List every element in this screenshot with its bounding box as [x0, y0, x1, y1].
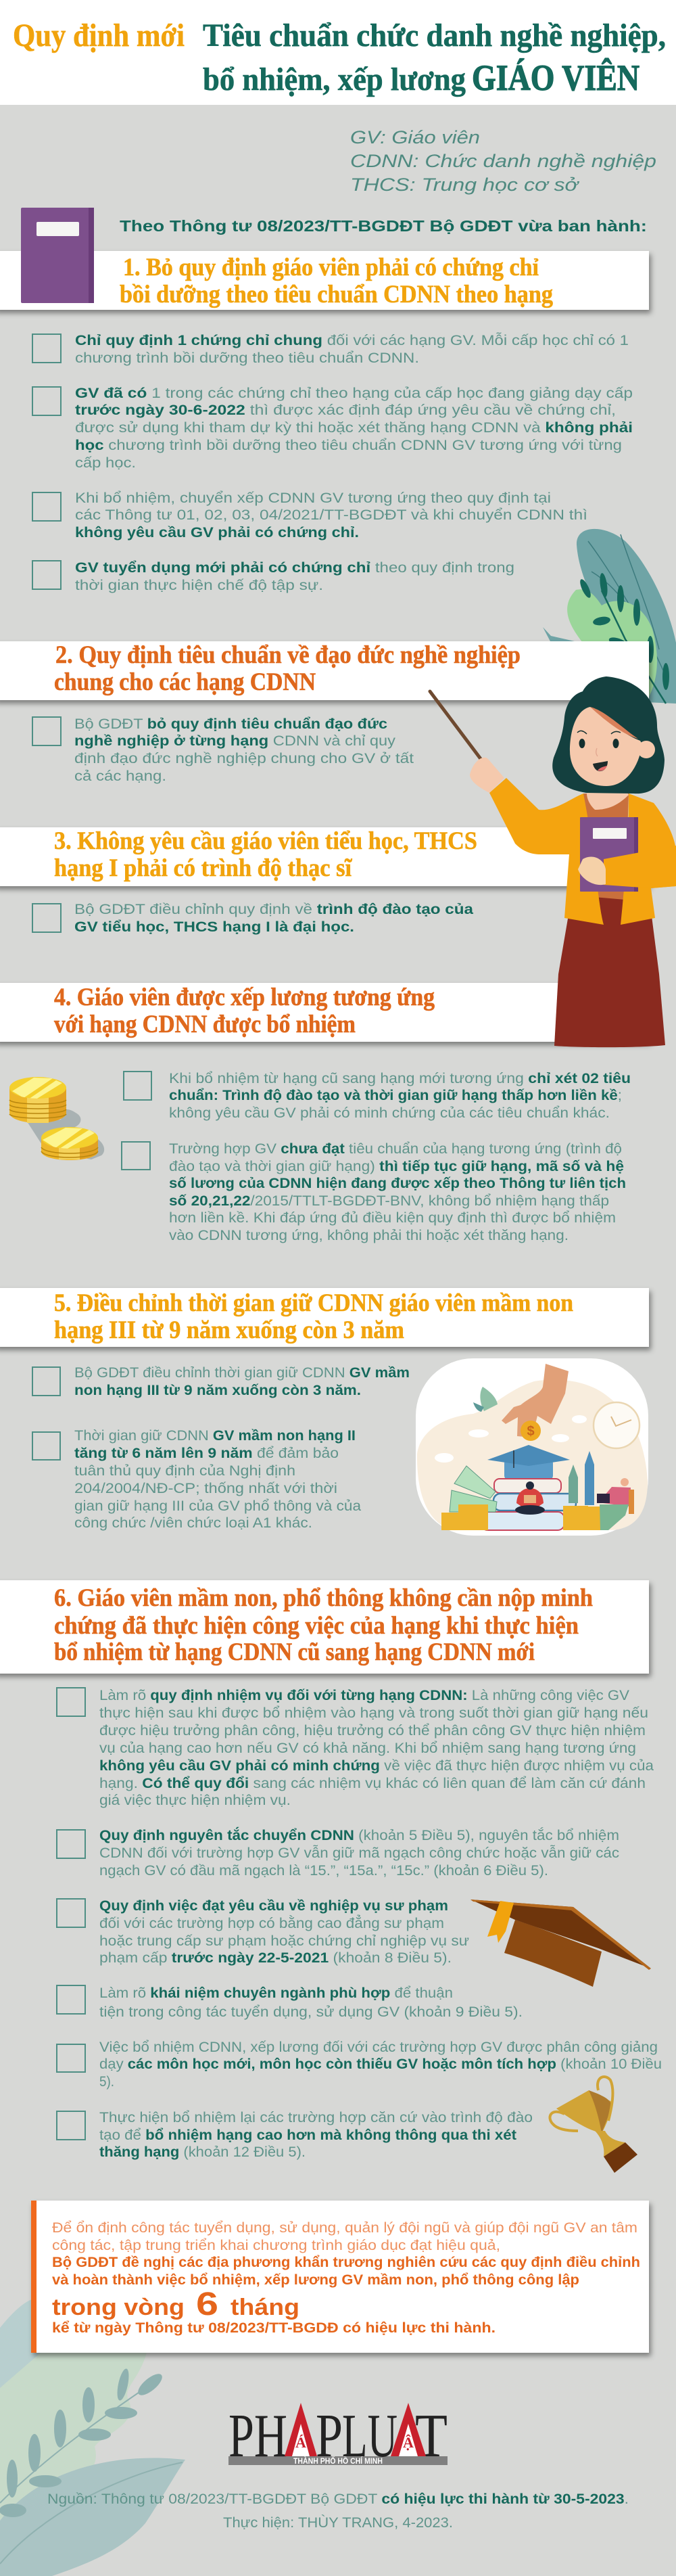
section 4 items: không yêu cầu GV phải có minh chứng của các tiêu chuẩn khác.: [169, 1105, 610, 1121]
section 3 item: GV tiểu học, THCS hạng I là đại học.: [74, 919, 354, 935]
heading 6: bổ nhiệm từ hạng CDNN cũ sang hạng CDNN mới: [54, 1638, 535, 1666]
skirt: [554, 895, 665, 1047]
section 6 items: vụ của hạng cao hơn nếu GV có khả năng. Khi bổ nhiệm sang hạng tương ứng: [99, 1741, 636, 1756]
books: [494, 1479, 561, 1493]
logo: Pháp Luật: Á: [295, 2434, 306, 2451]
icon: leaves top right: [543, 529, 676, 704]
neck: [587, 781, 629, 810]
section 6 items: Việc bổ nhiệm CDNN, xếp lương đối với các trường hợp GV được phân công giảng: [99, 2040, 658, 2055]
heading 4: với hạng CDNN được bổ nhiệm: [54, 1011, 356, 1038]
heading 5: [0, 1288, 649, 1347]
man with laptop: [600, 1487, 631, 1506]
holding hand: [578, 856, 606, 885]
title: GIÁO VIÊN: [472, 58, 639, 98]
section 6 items: được hiệu trưởng phân công, hiệu trưởng có thể phân công GV thực hiện nhiệm: [99, 1723, 646, 1739]
pencils: [569, 1465, 578, 1503]
section 6 items: không yêu cầu GV phải có minh chứng về việc đã thực hiện được nhiệm vụ của: [99, 1758, 654, 1774]
heading 5: hạng III từ 9 năm xuống còn 3 năm: [54, 1316, 404, 1344]
illustration: money and education: $: [527, 1424, 535, 1439]
abbreviations legend: GV: Giáo viên: [350, 127, 480, 147]
section 5 items: [32, 1365, 410, 1531]
section 1 items: Chỉ quy định 1 chứng chỉ chung đối với các hạng GV. Mỗi cấp học chỉ có 1: [75, 333, 629, 348]
section 1 items: trước ngày 30-6-2022 thì được xác định đáp ứng yêu cầu về chứng chỉ,: [75, 402, 616, 418]
raised hand: [470, 758, 504, 793]
icon: leaves bottom left: [0, 2297, 185, 2576]
section 5 items: gian giữ hạng III của GV phổ thông và của: [74, 1498, 361, 1514]
section 6 items: [57, 1688, 662, 2160]
section 4 items: hơn liền kề. Khi đáp ứng đủ điều kiện quy định thì được bổ nhiệm: [169, 1210, 616, 1226]
illustration: teacher: [430, 676, 676, 1047]
title: Quy định mới: [13, 18, 185, 53]
heading 2: 2. Quy định tiêu chuẩn về đạo đức nghề nghiệp: [55, 641, 521, 669]
section 1 items: thời gian thực hiện chế độ tập sự.: [75, 578, 323, 593]
eyes and mouth: [579, 739, 585, 748]
section 6 items: tiện trong công tác tuyển dụng, sử dụng GV (khoản 9 Điều 5).: [99, 2004, 523, 2020]
section 3 item: [32, 902, 473, 935]
leaves: [480, 1387, 498, 1411]
heading 4: [0, 983, 649, 1042]
callout: conclusion: Bộ GDĐT đề nghị các địa phương khẩn trương nghiên cứu các quy định điều chỉnh: [52, 2255, 640, 2270]
source credits: Nguồn: Thông tư 08/2023/TT-BGDĐT Bộ GDĐT có hiệu lực thi hành từ 30-5-2023 .: [47, 2491, 629, 2507]
heading 4: 4. Giáo viên được xếp lương tương ứng: [54, 984, 435, 1011]
section 5 items: non hạng III từ 9 năm xuống còn 3 năm.: [74, 1383, 361, 1398]
intro line: Theo Thông tư 08/2023/TT-BGDĐT Bộ GDĐT vừa ban hành:: [120, 217, 647, 235]
section 5 items: công chức /viên chức loại A1 khác.: [74, 1515, 312, 1531]
hair: [552, 676, 665, 794]
section 6 items: đối với các trường hợp có bằng cao đẳng sư phạm: [99, 1915, 444, 1931]
callout: conclusion: 6: [196, 2286, 218, 2322]
callout: conclusion: và hoàn thành việc bổ nhiệm, xếp lương GV mầm non, phổ thông công lập: [52, 2272, 579, 2288]
hand: [502, 1364, 569, 1438]
cardigan sleeve over book: [604, 846, 676, 888]
section 6 items: Làm rõ quy định nhiệm vụ đối với từng hạng CDNN: Là những công việc GV: [99, 1688, 629, 1703]
section 6 items: giá việc thực hiện nhiệm vụ.: [99, 1793, 291, 1808]
section 4 items: chuẩn: Trình độ đào tạo và thời gian giữ hạng thấp hơn liền kề ;: [169, 1088, 622, 1103]
section 1 items: được sử dụng khi tham dự kỳ thi hoặc xét thăng hạng CDNN và không phải: [75, 420, 633, 436]
abbreviations legend: [350, 127, 656, 195]
section 3 item: Bộ GDĐT điều chỉnh quy định về trình độ đào tạo của: [74, 902, 473, 917]
coin stacks: [441, 1504, 488, 1530]
icon: gold coins: [9, 1077, 104, 1160]
logo: Pháp Luật: PH: [228, 2401, 287, 2470]
callout: conclusion: tháng: [231, 2295, 299, 2320]
heading 6: 6. Giáo viên mầm non, phổ thông không cần nộp minh: [54, 1584, 593, 1612]
coin shadows: [27, 1109, 80, 1145]
logo: Pháp Luật: THÀNH PHỐ HỒ CHÍ MINH: [293, 2456, 383, 2466]
source credits: [47, 2491, 629, 2531]
section 1 items: cấp học.: [75, 455, 136, 471]
clouds: [468, 1429, 489, 1438]
section 1 items: không yêu cầu GV phải có chứng chỉ.: [75, 525, 359, 540]
abbreviations legend: CDNN: Chức danh nghề nghiệp: [350, 151, 656, 171]
section 6 items: hạng. Có thể quy đổi sang các nhiệm vụ khác có liên quan để làm căn cứ đánh: [99, 1776, 646, 1791]
section 6 items: Làm rõ khái niệm chuyên ngành phù hợp để thuận: [99, 1985, 453, 2001]
title: [13, 18, 666, 98]
callout: conclusion: trong vòng: [52, 2295, 185, 2320]
heading 3: 3. Không yêu cầu giáo viên tiểu học, THCS: [54, 827, 477, 855]
logo: Pháp Luật: P: [316, 2401, 343, 2470]
section 4 items: số lương của CDNN hiện đang được xếp theo Thông tư liên tịch: [169, 1176, 626, 1191]
section 6 items: ngạch GV có đầu mã ngạch là “15.”, “15a.”, “15c.” (khoản 6 Điều 5).: [99, 1863, 548, 1879]
section 5 items: Bộ GDĐT điều chỉnh thời gian giữ CDNN GV mầm: [74, 1365, 410, 1381]
logo: Pháp Luật: Ậ: [403, 2434, 414, 2451]
section 1 items: GV tuyển dụng mới phải có chứng chỉ theo quy định trong: [75, 560, 514, 576]
section 2 item: định đạo đức nghề nghiệp chung cho GV ở tất: [74, 751, 414, 766]
section 4 items: Trường hợp GV chưa đạt tiêu chuẩn của hạng tương ứng (trình độ: [169, 1141, 622, 1157]
section 6 items: thực hiện sau khi được bổ nhiệm vào hạng và trong suốt thời gian giữ hạng nếu: [99, 1705, 648, 1721]
tall stack: [9, 1088, 66, 1123]
face: [570, 707, 642, 786]
money: [454, 1466, 496, 1498]
section 5 items: 204/2004/NĐ-CP; thống nhất với thời: [74, 1481, 337, 1496]
source credits: Thực hiện: THÙY TRANG, 4-2023.: [223, 2515, 453, 2531]
cardigan: [564, 794, 604, 925]
section 1 items: [32, 333, 633, 593]
graduation cap: [504, 1458, 553, 1481]
callout: conclusion: Để ổn định công tác tuyển dụng, sử dụng, quản lý đội ngũ và giúp đội ngũ GV an tâm: [52, 2220, 637, 2236]
callout: conclusion: kể từ ngày Thông tư 08/2023/TT-BGDĐ có hiệu lực thi hành.: [52, 2320, 496, 2336]
section 2 item: Bộ GDĐT bỏ quy định tiêu chuẩn đạo đức: [74, 716, 387, 732]
icon: trophy: [550, 2077, 637, 2173]
section 2 item: cả các hạng.: [74, 768, 166, 784]
heading 2: [0, 641, 649, 700]
logo: Pháp Luật: T: [415, 2401, 448, 2470]
section 2 item: nghề nghiệp ở từng hạng CDNN và chỉ quy: [74, 733, 396, 749]
small stack: [41, 1138, 98, 1160]
section 6 items: CDNN đối với trường hợp GV vẫn giữ mã ngạch công chức hoặc vẫn giữ các: [99, 1845, 619, 1861]
callout: conclusion: công tác, tập trung triển khai chương trình giáo dục đạt hiệu quả,: [52, 2238, 500, 2253]
raised arm: [489, 778, 583, 854]
section 1 items: chương trình bồi dưỡng theo tiêu chuẩn CDNN.: [75, 350, 419, 366]
heading 3: hạng I phải có trình độ thạc sĩ: [54, 854, 353, 882]
clock: [594, 1402, 639, 1448]
heading 5: 5. Điều chỉnh thời gian giữ CDNN giáo viên mầm non: [54, 1289, 573, 1317]
section 6 items: phạm cấp trước ngày 22-5-2021 (khoản 8 Điều 5).: [99, 1950, 452, 1966]
heading 6: chứng đã thực hiện công việc của hạng khi thực hiện: [54, 1612, 579, 1640]
heading 1: bồi dưỡng theo tiêu chuẩn CDNN theo hạng: [120, 281, 553, 308]
coin: [521, 1421, 541, 1441]
section 4 items: đào tạo và thời gian giữ hạng) thì tiếp tục giữ hạng, mã số và hệ: [169, 1159, 624, 1174]
section 5 items: Thời gian giữ CDNN GV mầm non hạng II: [74, 1428, 356, 1444]
section 1 items: GV đã có 1 trong các chứng chỉ theo hạng của cấp học đang giảng dạy cấp: [75, 386, 633, 401]
section 4 items: vào CDNN tương ứng, không phải thi hoặc xét thăng hạng.: [169, 1228, 569, 1243]
heading 6: [0, 1580, 649, 1674]
icon: graduation cap: [470, 1900, 651, 1987]
section 4 items: số 20,21,22 /2015/TTLT-BGDĐT-BNV, không bổ nhiệm hạng thấp: [169, 1193, 609, 1209]
section 4 items: [122, 1071, 631, 1243]
heading 2: chung cho các hạng CDNN: [54, 668, 316, 696]
section 6 items: Thực hiện bổ nhiệm lại các trường hợp căn cứ vào trình độ đào: [99, 2110, 533, 2125]
section 6 items: tạo để bổ nhiệm hạng cao hơn mà không thông qua thi xét: [99, 2128, 516, 2143]
section 6 items: Quy định việc đạt yêu cầu về nghiệp vụ sư phạm: [99, 1898, 448, 1914]
icon: purple book: [21, 208, 94, 303]
section 6 items: 5).: [99, 2074, 114, 2090]
abbreviations legend: THCS: Trung học cơ sở: [350, 175, 580, 195]
logo: Pháp Luật: [228, 2401, 448, 2470]
section 1 items: học chương trình bồi dưỡng theo tiêu chuẩn CDNN GV tương ứng với từng: [75, 438, 622, 453]
seated woman: [516, 1488, 544, 1507]
held book: [580, 817, 638, 892]
section 5 items: tuân thủ quy định của Nghị định: [74, 1463, 295, 1479]
section 1 items: Khi bổ nhiệm, chuyển xếp CDNN GV tương ứng theo quy định tại: [75, 490, 551, 506]
title: bổ nhiệm, xếp lương: [203, 62, 466, 97]
section 5 items: tăng từ 6 năm lên 9 năm để đảm bảo: [74, 1446, 339, 1461]
section 4 items: Khi bổ nhiệm từ hạng cũ sang hạng mới tương ứng chỉ xét 02 tiêu: [169, 1071, 631, 1086]
shirt: [571, 794, 629, 900]
heading 1: [0, 251, 649, 310]
section 6 items: dạy các môn học mới, môn học còn thiếu GV hoặc môn tích hợp (khoản 10 Điều: [99, 2056, 662, 2072]
heading 3: [0, 827, 649, 886]
heading 1: 1. Bỏ quy định giáo viên phải có chứng chỉ: [123, 254, 539, 281]
section 2 item: [32, 716, 414, 784]
section 6 items: Quy định nguyên tắc chuyển CDNN (khoản 5 Điều 5), nguyên tắc bổ nhiệm: [99, 1827, 619, 1843]
logo: Pháp Luật: LU: [342, 2401, 397, 2470]
callout: conclusion: [31, 2201, 649, 2353]
pointer stick: [430, 691, 493, 776]
section 6 items: hoặc trung cấp sư phạm hoặc chứng chỉ nghiệp vụ sư: [99, 1933, 469, 1949]
illustration: money and education: [416, 1358, 648, 1536]
section 1 items: các Thông tư 01, 02, 03, 04/2021/TT-BGDĐT và khi chuyển CDNN thì: [75, 507, 587, 523]
section 6 items: thăng hạng (khoản 12 Điều 5).: [99, 2144, 306, 2160]
